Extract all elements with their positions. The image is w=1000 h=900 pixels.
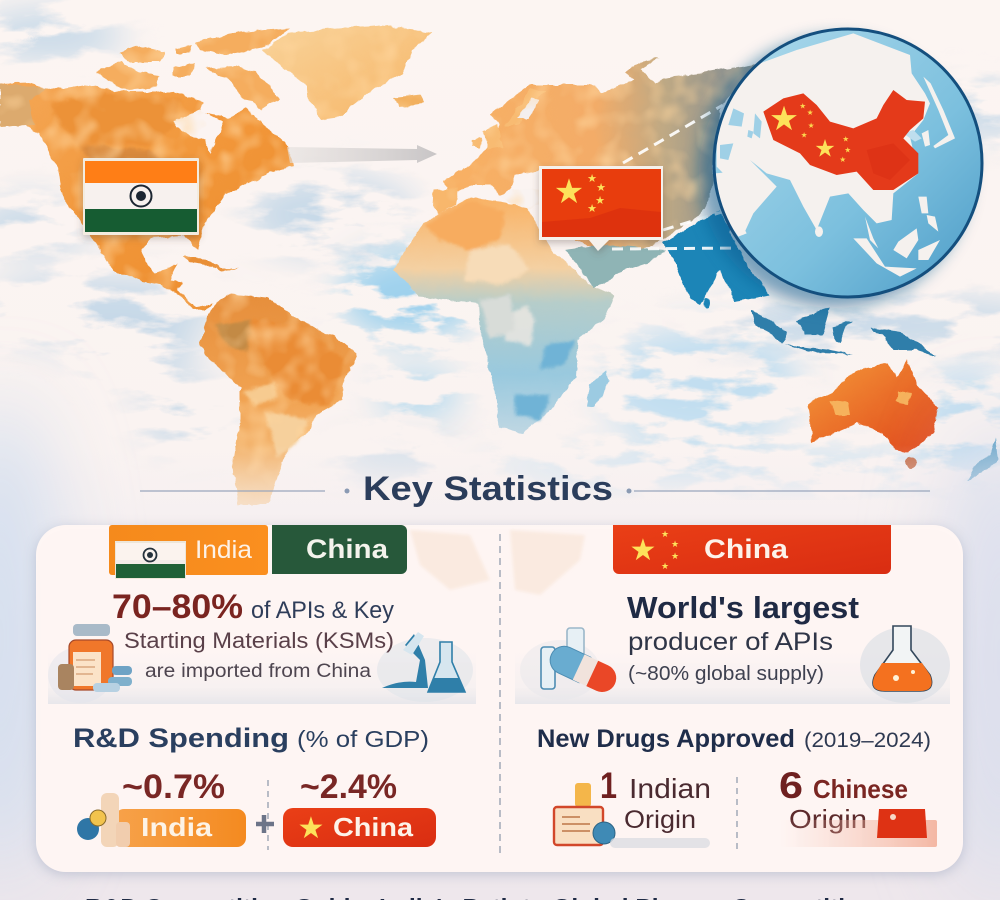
stat: India R&D: ~0.7% [122, 768, 225, 806]
heading: new drugs approved: (2019–2024) [804, 729, 931, 752]
stat: India R&D: India [141, 812, 213, 842]
globe magnifier: China in Asia: ★ [839, 155, 846, 164]
ocean clouds [0, 0, 1000, 500]
icon: vials and capsule [541, 628, 621, 697]
tab: China (green): China [306, 534, 389, 564]
column: China [537, 525, 937, 852]
heading: R&D spending: (% of GDP) [297, 726, 429, 752]
heading: Key Statistics: Key Statistics [363, 470, 613, 508]
stat: 6 Chinese origin: 6 [779, 765, 803, 806]
tab: China (green) [272, 525, 407, 574]
tab: China red: ★ [671, 539, 679, 549]
globe magnifier: China in Asia: ★ [769, 101, 799, 138]
tab: China red: China [704, 534, 789, 564]
world map [0, 25, 998, 505]
stat: 6 Chinese origin: Origin [789, 804, 867, 834]
globe magnifier: China in Asia: ★ [808, 121, 814, 130]
stat: China R&D: China [333, 812, 414, 842]
stat: China R&D [283, 768, 436, 847]
globe: China map [763, 90, 925, 190]
tab: China red: ★ [630, 534, 656, 567]
fade behind heading [0, 445, 1000, 900]
tab: China red [613, 525, 891, 574]
map: North America [0, 83, 295, 310]
stat: world's largest producer: World's largest [627, 590, 859, 625]
stat: world's largest producer: (~80% global supply) [628, 663, 824, 685]
heading: R&D spending: R&D Spending [73, 723, 289, 753]
heading: R&D spending [73, 723, 429, 753]
arrow: India to China flow [287, 145, 437, 163]
stat: 70-80% imports [112, 588, 394, 682]
stat: 6 Chinese origin [779, 765, 908, 834]
flag: China on map: ★ [587, 173, 597, 185]
map: Australia [808, 360, 938, 469]
icon: medicine bottle and pills [58, 624, 132, 692]
flag: India on map [83, 158, 199, 235]
stat: 1 Indian origin [600, 765, 711, 834]
divider [736, 777, 738, 852]
connector dashes to globe [612, 105, 742, 249]
globe magnifier: China in Asia: ★ [844, 146, 851, 155]
flag: China on map: ★ [554, 173, 584, 211]
globe magnifier: China in Asia [714, 29, 982, 297]
map: Greenland and Arctic islands [96, 25, 432, 120]
tab: China red: ★ [661, 561, 669, 571]
globe land: Asia [717, 33, 930, 235]
stat: 1 Indian origin: 1 [600, 765, 617, 806]
map: Southeast Asia islands [751, 307, 937, 357]
stat: 1 Indian origin: Origin [624, 806, 696, 834]
stat: 1 Indian origin: Indian [629, 773, 711, 804]
icon: India flag small [115, 541, 186, 579]
stat: world's largest producer [627, 590, 859, 685]
flag: China on map [539, 166, 663, 251]
stat: China R&D: ~2.4% [300, 768, 397, 806]
flag: China on map: ★ [595, 195, 605, 207]
map: Africa [394, 197, 615, 433]
tab: India [109, 525, 268, 575]
globe shadow [699, 36, 971, 308]
stat: 70-80% imports: are imported from China [145, 661, 371, 682]
heading: new drugs approved [537, 725, 931, 753]
tab: China red: ★ [661, 529, 669, 539]
stat: 70-80% imports: of APIs & Key [251, 597, 394, 624]
stat: China R&D: ★ [298, 812, 324, 845]
tab: China red: ★ [671, 551, 679, 561]
panel: statistics card [36, 525, 963, 872]
edge tints [0, 400, 1000, 900]
divider [499, 534, 501, 857]
heading: new drugs approved: New Drugs Approved [537, 725, 795, 753]
map: New Zealand [967, 437, 998, 482]
icon: orange flask [873, 626, 932, 691]
map: South America [200, 293, 357, 505]
stat: 6 Chinese origin: Chinese [813, 774, 908, 804]
stat: India R&D [115, 768, 246, 847]
divider and plus [256, 780, 274, 850]
column: India [58, 525, 465, 850]
stat: world's largest producer: producer of APIs [628, 628, 833, 656]
heading: Key Statistics [140, 470, 930, 508]
map: Europe and Asia [432, 58, 760, 250]
icon: red flag [780, 809, 937, 847]
flag: China on map: ★ [587, 203, 597, 215]
globe magnifier: China in Asia: ★ [799, 101, 806, 110]
stat: 70-80% imports: 70–80% [112, 588, 243, 626]
globe magnifier: China in Asia: ★ [814, 136, 836, 163]
globe magnifier: China in Asia: ★ [842, 135, 849, 144]
icon: report and globe [554, 783, 710, 848]
stat: 70-80% imports: Starting Materials (KSMs) [124, 628, 394, 653]
icon: pills and capsule bottle [77, 793, 130, 847]
globe magnifier: China in Asia: ★ [807, 108, 813, 117]
map: Arabia and blue South Asia [565, 210, 770, 309]
tab: India: India [195, 536, 252, 564]
flag: China on map: ★ [596, 182, 606, 194]
icon: microscope and flask [382, 632, 465, 692]
globe magnifier: China in Asia: ★ [801, 131, 807, 140]
